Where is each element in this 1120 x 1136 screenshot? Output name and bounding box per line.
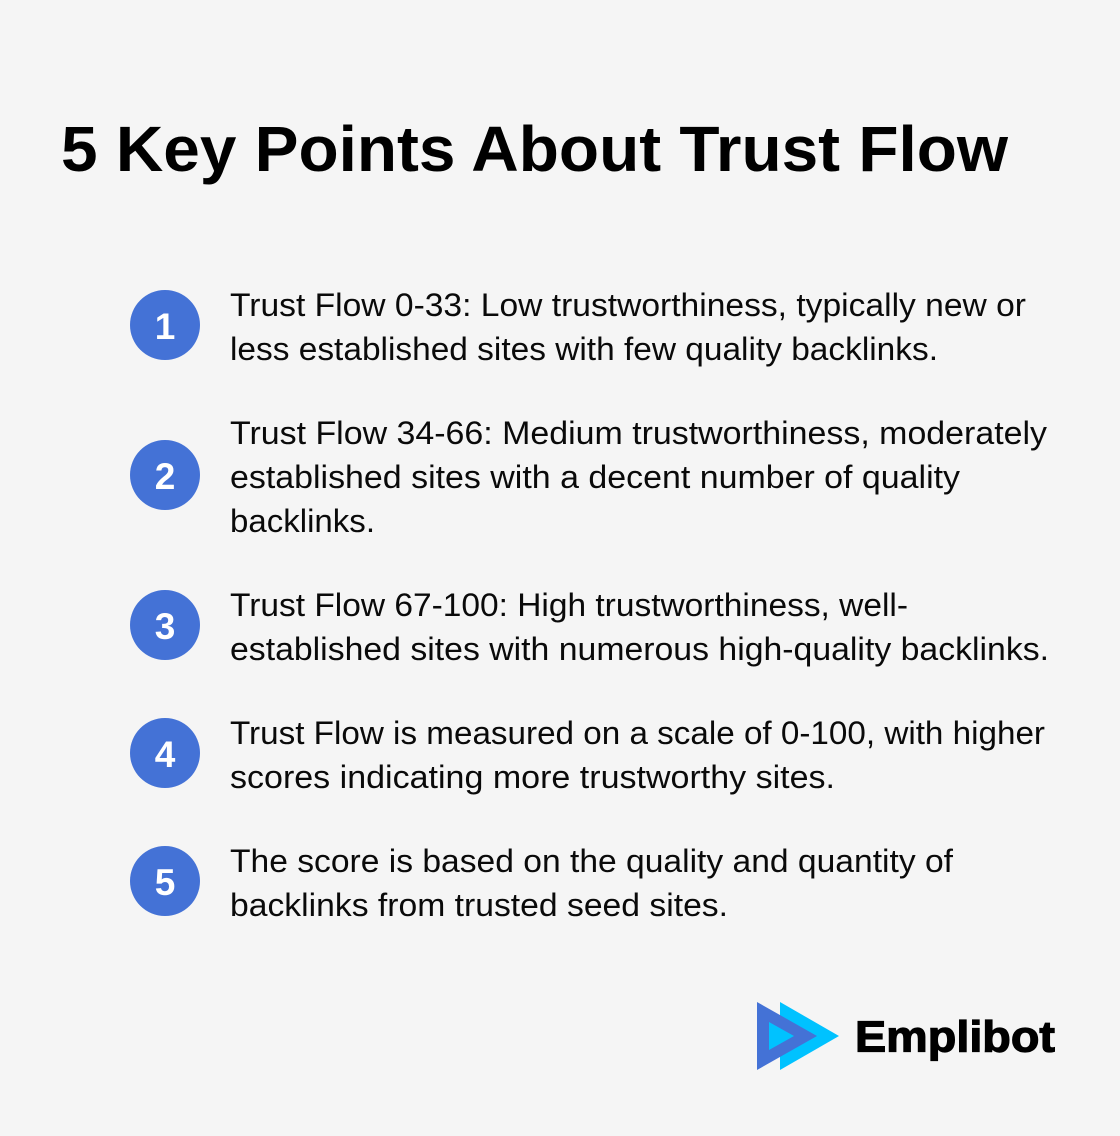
text block 3 xyxy=(230,587,1049,667)
text block 1: Trust Flow 0-33: Low trustworthiness, typically new or xyxy=(230,287,1026,323)
list item 2 xyxy=(130,415,1047,539)
list item 4 xyxy=(130,715,1045,795)
text block 1: less established sites with few quality backlinks. xyxy=(230,331,938,367)
icon: play triangles xyxy=(757,1002,839,1070)
text block 2: backlinks. xyxy=(230,503,375,539)
badge 1: 1 xyxy=(155,306,175,347)
badge 2: 2 xyxy=(155,456,175,497)
badge 5 xyxy=(130,846,200,916)
text block 2: Trust Flow 34-66: Medium trustworthiness, moderately xyxy=(230,415,1047,451)
title: 5 Key Points About Trust Flow xyxy=(61,113,1008,185)
text block 4: scores indicating more trustworthy sites. xyxy=(230,759,835,795)
badge 2 xyxy=(130,440,200,510)
wordmark: Emplibot xyxy=(855,1012,1055,1062)
badge 5: 5 xyxy=(155,862,175,903)
badge 3: 3 xyxy=(155,606,175,647)
text block 2: established sites with a decent number of quality xyxy=(230,459,960,495)
text block 3: Trust Flow 67-100: High trustworthiness, well- xyxy=(230,587,908,623)
text block 3: established sites with numerous high-quality backlinks. xyxy=(230,631,1049,667)
text block 5 xyxy=(230,843,953,923)
text block 4: Trust Flow is measured on a scale of 0-100, with higher xyxy=(230,715,1045,751)
list item 3 xyxy=(130,587,1049,667)
text block 1 xyxy=(230,287,1026,367)
text block 5: The score is based on the quality and quantity of xyxy=(230,843,953,879)
logo: Emplibot xyxy=(757,1002,1055,1070)
badge 4 xyxy=(130,718,200,788)
list item 5 xyxy=(130,843,953,923)
badge 1 xyxy=(130,290,200,360)
text block 4 xyxy=(230,715,1045,795)
list item 1 xyxy=(130,287,1026,367)
badge 4: 4 xyxy=(155,734,176,775)
text block 5: backlinks from trusted seed sites. xyxy=(230,887,728,923)
text block 2 xyxy=(230,415,1047,539)
badge 3 xyxy=(130,590,200,660)
